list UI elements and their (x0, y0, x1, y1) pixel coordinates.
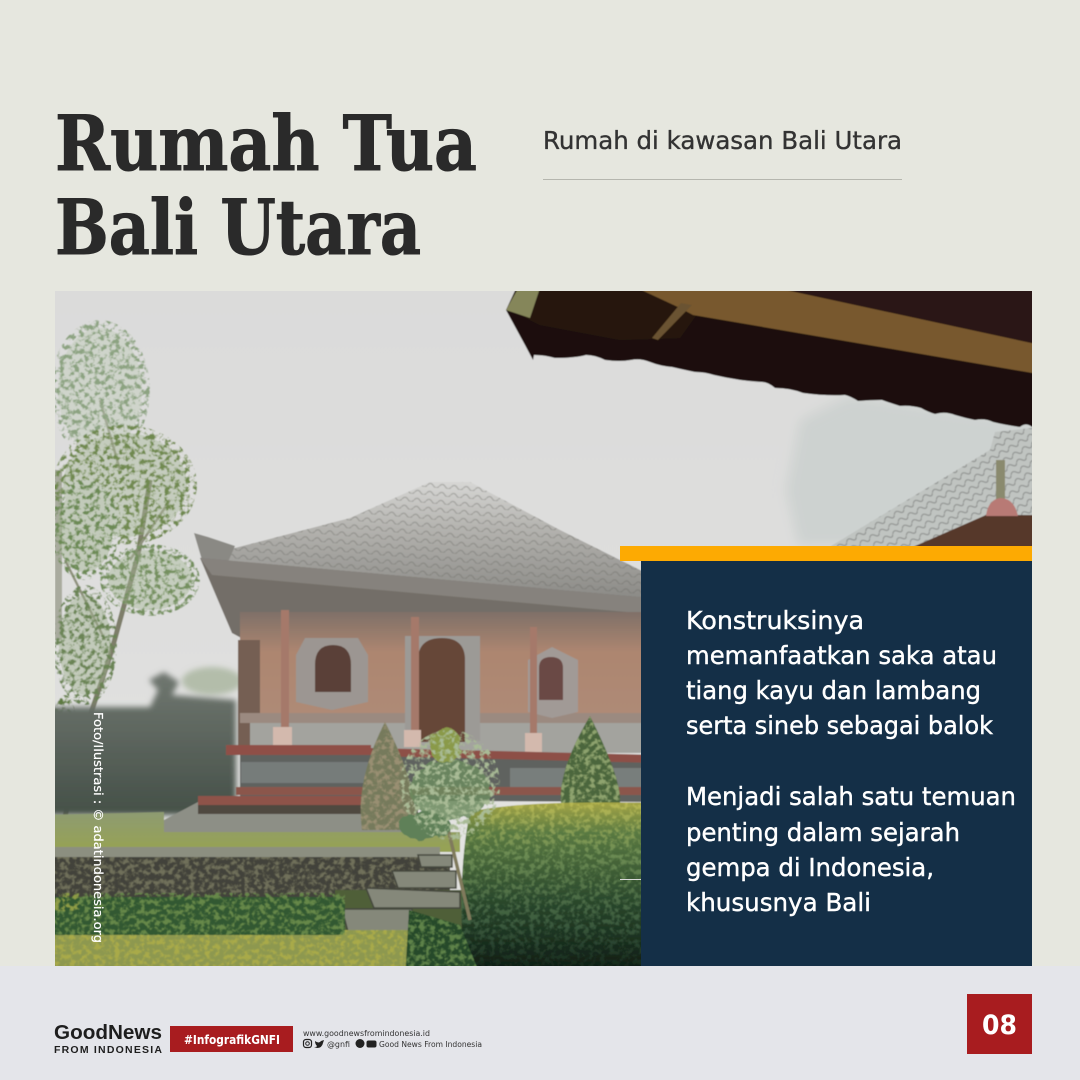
website and social handles: www.goodnewsfromindonesia.id (303, 1029, 430, 1038)
title: Rumah Tua (55, 99, 477, 188)
paragraph 1 (686, 606, 997, 740)
logo: GoodNews From Indonesia: FROM INDONESIA (54, 1044, 162, 1056)
paragraph 1: tiang kayu dan lambang (686, 676, 981, 705)
paragraph 1: serta sineb sebagai balok (686, 711, 993, 740)
page number badge (967, 994, 1032, 1054)
door (405, 636, 480, 742)
left misty tree (55, 320, 200, 815)
low hedge (40, 893, 345, 935)
website and social handles (303, 1029, 482, 1049)
title (55, 99, 477, 272)
dried shrub and conifer (361, 716, 620, 830)
logo: GoodNews From Indonesia (54, 1022, 162, 1056)
house (164, 482, 660, 832)
photo credit: Foto/Ilustrasi : © adatindonesia.org (91, 712, 106, 943)
paragraph 2: gempa di Indonesia, (686, 853, 934, 882)
stone retaining wall (40, 847, 450, 902)
paragraph 2: penting dalam sejarah (686, 818, 960, 847)
window left (296, 638, 368, 710)
right roof (832, 428, 1032, 546)
background wall and shrine (40, 667, 242, 815)
distant misty tree on the right (786, 395, 1050, 546)
large hedge (405, 802, 641, 966)
logo: GoodNews From Indonesia: GoodNews (54, 1022, 162, 1044)
paragraph 2 (686, 782, 1016, 917)
young tree (399, 727, 500, 920)
ground beneath steps (334, 889, 463, 931)
plinth (240, 750, 660, 802)
footer band (0, 966, 1080, 1080)
walls (240, 612, 641, 714)
lawn (40, 812, 460, 852)
paragraph 2: Menjadi salah satu temuan (686, 782, 1016, 811)
window right (528, 647, 578, 718)
stone steps (342, 855, 460, 932)
columns (281, 610, 537, 733)
under eave (200, 558, 626, 638)
panel: description (620, 561, 1032, 966)
orange accent bar (620, 546, 1032, 561)
paragraph 1: Konstruksinya (686, 606, 864, 635)
paragraph 2: khususnya Bali (686, 888, 871, 917)
title: Bali Utara (55, 183, 421, 272)
website and social handles: Good News From Indonesia (379, 1040, 482, 1049)
mossy ground (55, 929, 408, 966)
subtitle: Rumah di kawasan Bali Utara (543, 126, 902, 155)
website and social handles: @gnfi (327, 1040, 350, 1049)
hashtag badge: #InfografikGNFI (184, 1033, 280, 1047)
photo: foggy Balinese house (35, 275, 1050, 980)
eave in foreground (506, 291, 1032, 428)
paragraph 1: memanfaatkan saka atau (686, 641, 997, 670)
page number badge: 08 (982, 1010, 1017, 1041)
roof (194, 482, 660, 600)
hashtag badge (170, 1026, 293, 1052)
